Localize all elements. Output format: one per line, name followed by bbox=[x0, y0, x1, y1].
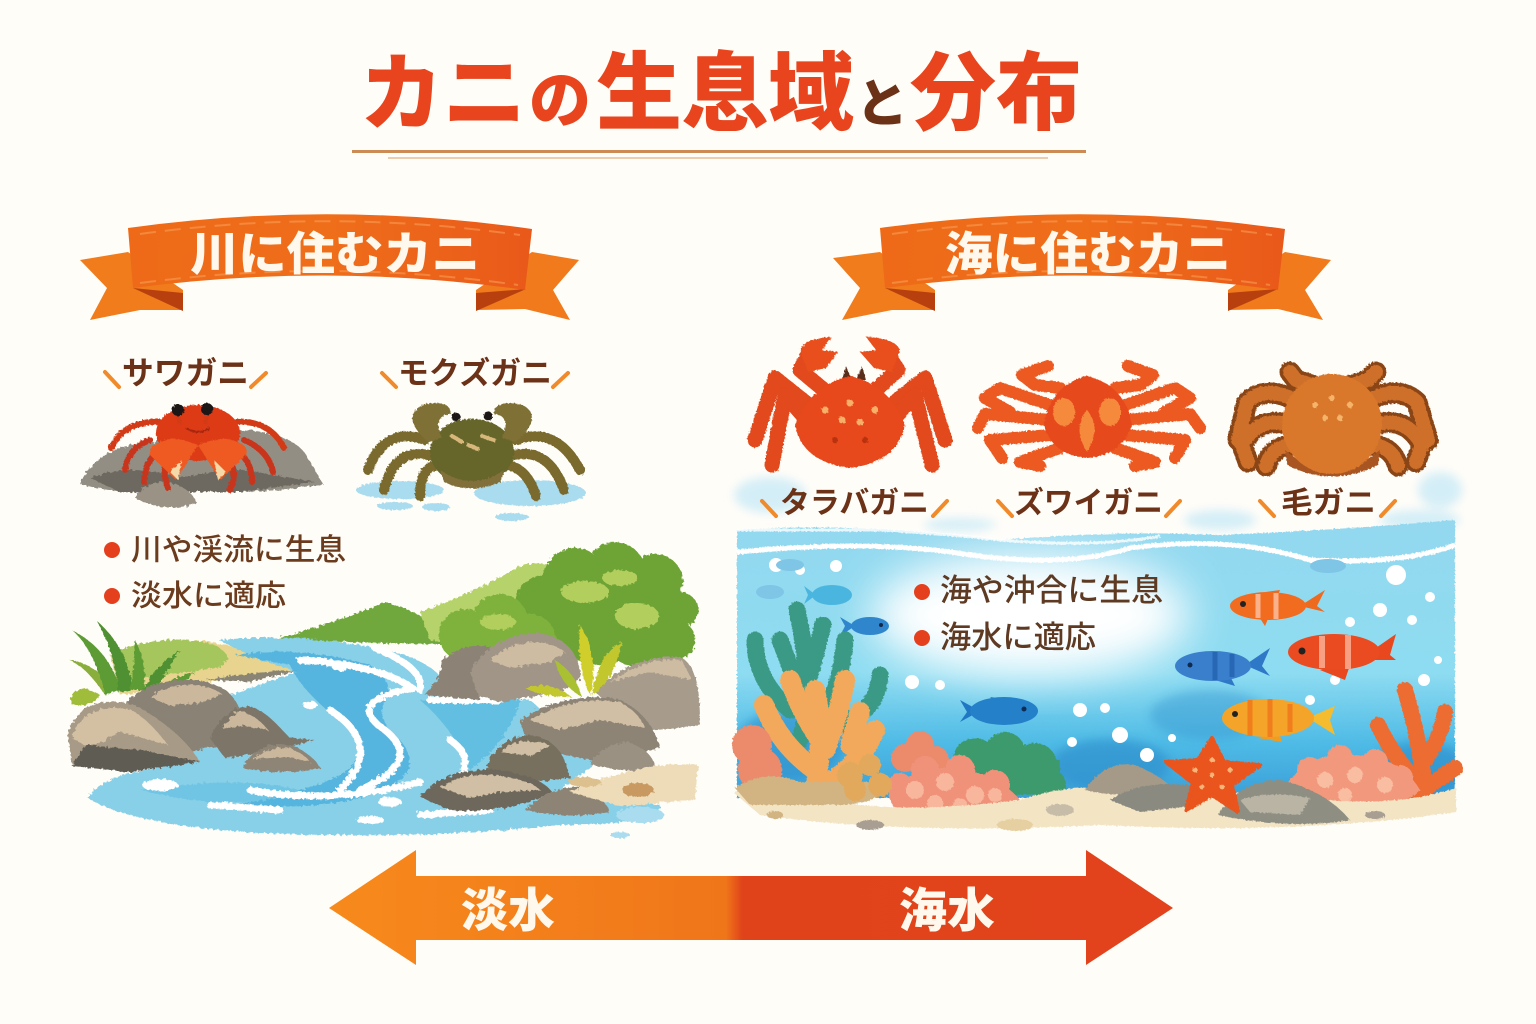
title: 分布 bbox=[910, 47, 1082, 142]
left rocks bbox=[68, 680, 320, 772]
bullet list: freshwater: 淡水に適応 bbox=[131, 580, 286, 613]
crab: ズワイガニ bbox=[978, 366, 1200, 466]
rock under サワガニ bbox=[80, 430, 323, 507]
sand floor bbox=[733, 788, 1456, 828]
fish: orange striped bbox=[1230, 590, 1325, 626]
title: 生息域 bbox=[596, 47, 854, 142]
pink corals left bbox=[732, 725, 949, 792]
bullet list: seawater: 海や沖合に生息 bbox=[940, 573, 1163, 608]
crab: タラバガニ bbox=[755, 337, 945, 468]
fish silhouettes bbox=[756, 559, 1346, 599]
bullet list: seawater bbox=[914, 573, 1163, 655]
arrow: freshwater to seawater bbox=[329, 850, 1173, 965]
yellow grass bbox=[525, 625, 622, 697]
label: 毛ガニ: 毛ガニ bbox=[1281, 487, 1376, 520]
title underline bbox=[352, 150, 1086, 159]
crab: サワガニ bbox=[111, 403, 284, 490]
title: と bbox=[856, 76, 908, 134]
title: カニ bbox=[360, 47, 526, 141]
right coral bbox=[1378, 690, 1455, 795]
pebbles bbox=[767, 804, 1385, 831]
crab: モクズガニ bbox=[368, 403, 580, 496]
green dome coral bbox=[953, 732, 1066, 801]
bullet list: seawater: 海水に適応 bbox=[940, 620, 1096, 655]
bullet list: freshwater bbox=[104, 534, 346, 613]
fish: red striped bbox=[1288, 634, 1396, 680]
label: モクズガニ: モクズガニ bbox=[398, 356, 552, 391]
bullet list: freshwater: 川や渓流に生息 bbox=[131, 534, 346, 567]
tan rocks and yellow coral bbox=[735, 754, 892, 805]
reef bbox=[732, 610, 1456, 831]
title bbox=[360, 47, 1082, 142]
heading text: 川に住むカニ: 川に住むカニ bbox=[190, 228, 480, 280]
orange branching coral bbox=[764, 680, 875, 790]
fish: small pale blue bbox=[804, 585, 852, 605]
green branching coral bbox=[755, 610, 880, 740]
water splashes bbox=[610, 807, 664, 838]
water puddle under モクズガニ bbox=[356, 480, 586, 521]
seabed rocks bbox=[1085, 764, 1350, 824]
illustration: sea bbox=[732, 472, 1470, 831]
label: ズワイガニ: ズワイガニ bbox=[1014, 486, 1163, 520]
fish: blue right bbox=[1175, 648, 1270, 686]
pink coral right bbox=[1282, 745, 1420, 812]
label: サワガニ: サワガニ bbox=[122, 355, 249, 391]
label: タラバガニ: タラバガニ bbox=[780, 487, 929, 520]
ribbon: freshwater heading bbox=[80, 214, 579, 320]
ribbon: seawater heading bbox=[833, 214, 1331, 320]
fish: small blue bbox=[840, 617, 889, 636]
starfish bbox=[1166, 738, 1260, 812]
heading text: 海に住むカニ: 海に住むカニ bbox=[945, 228, 1231, 280]
water bbox=[88, 638, 660, 835]
illustration: river bbox=[68, 542, 700, 838]
deep water shapes bbox=[735, 690, 1470, 798]
hills and bushes bbox=[270, 542, 698, 668]
crab: 毛ガニ bbox=[1238, 372, 1428, 476]
text glow bbox=[870, 553, 1190, 677]
bubbles bbox=[769, 558, 1442, 762]
pink coral center bbox=[888, 755, 1020, 818]
fish: yellow orange bbox=[1222, 699, 1335, 742]
label: 毛ガニ bbox=[1260, 487, 1395, 520]
left grass bbox=[68, 620, 195, 706]
right rocks bbox=[420, 633, 700, 816]
spray above water bbox=[734, 472, 1462, 532]
title: の bbox=[529, 67, 591, 136]
left bank bbox=[110, 640, 298, 695]
fish: blue center bbox=[960, 697, 1038, 725]
arrow label: 淡水: 淡水 bbox=[461, 884, 555, 937]
sea water bbox=[737, 520, 1455, 798]
arrow label: 海水: 海水 bbox=[899, 884, 995, 937]
